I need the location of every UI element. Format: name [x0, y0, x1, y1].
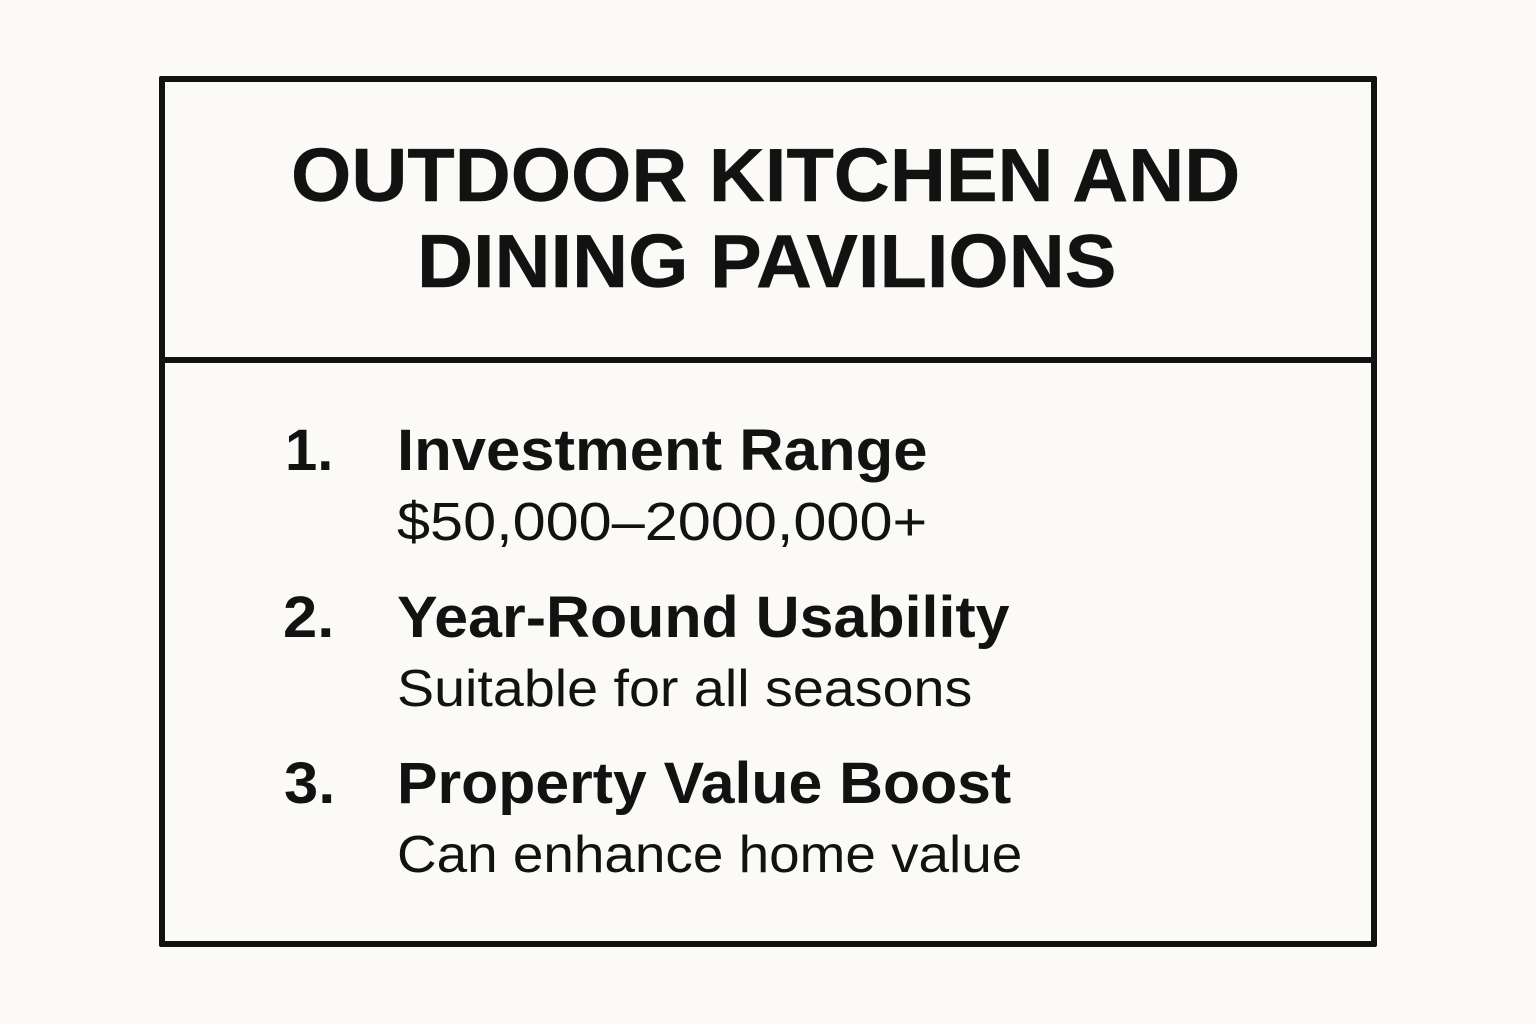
- item 1 number: 1.: [285, 418, 333, 483]
- item 3 description: Can enhance home value: [397, 826, 1022, 884]
- item 2 number: 2.: [283, 585, 334, 650]
- panel: outer frame: [159, 76, 1377, 947]
- item 1 heading: Investment Range: [397, 418, 928, 483]
- item 2 heading: Year-Round Usability: [397, 585, 1010, 650]
- item 3 heading: Property Value Boost: [397, 751, 1011, 816]
- item 1 description: $50,000–2000,000+: [397, 492, 927, 552]
- title: OUTDOOR KITCHEN AND: [291, 133, 1240, 217]
- item 2 description: Suitable for all seasons: [397, 660, 972, 718]
- item 3 number: 3.: [284, 751, 335, 816]
- title: [291, 133, 1240, 303]
- title: DINING PAVILIONS: [417, 219, 1116, 303]
- divider between title and list: [162, 357, 1374, 363]
